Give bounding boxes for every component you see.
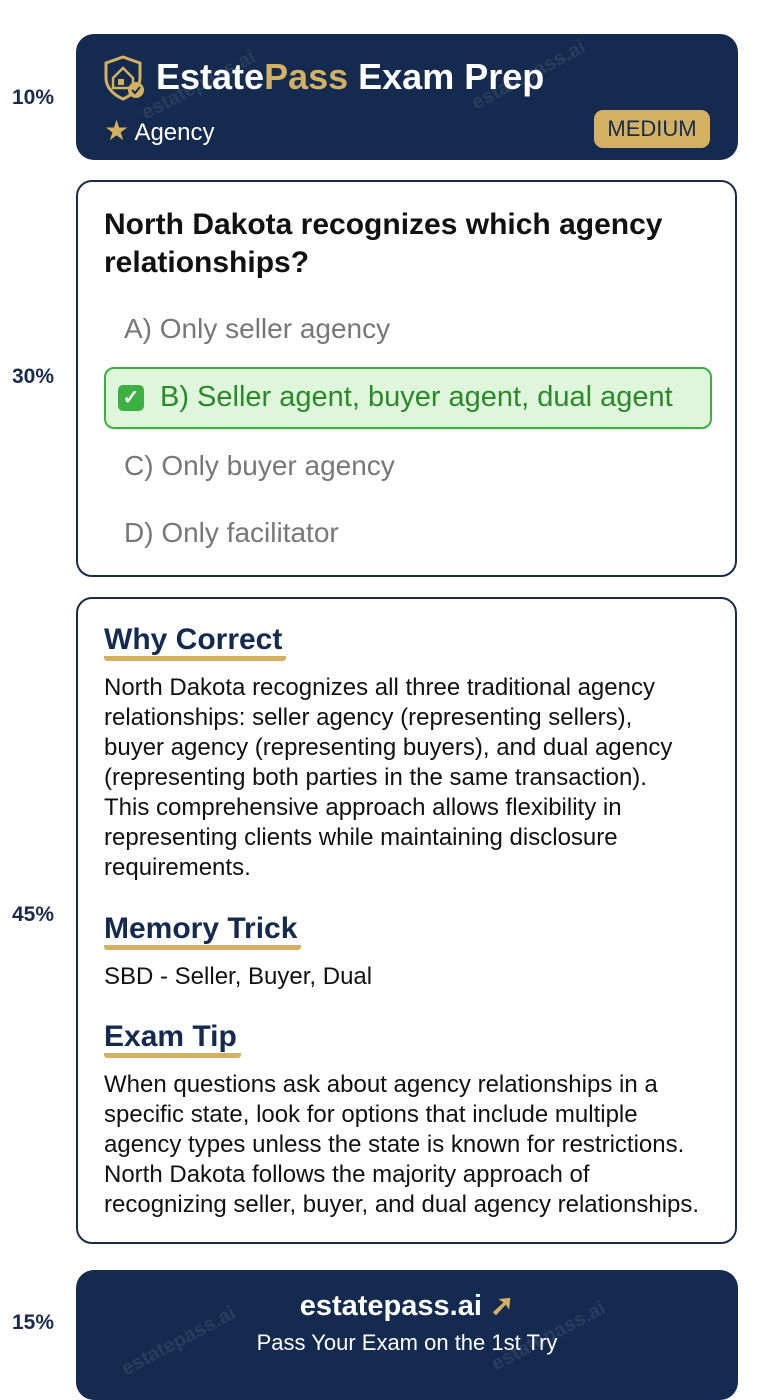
- label: 30%: 30%: [12, 365, 54, 388]
- icon: shield house: [104, 55, 144, 101]
- option A: A) Only seller agency: [124, 313, 390, 344]
- option B correct: [104, 367, 712, 429]
- heading: Exam Tip: Exam Tip: [104, 1020, 237, 1053]
- badge: MEDIUM: [594, 110, 710, 148]
- label: 45%: 45%: [12, 903, 54, 926]
- text: exam tip: recognizing seller, buyer, and dual agency relationships.: [104, 1191, 699, 1218]
- text: why correct: relationships: seller agency (representing sellers),: [104, 704, 632, 731]
- text: exam tip: specific state, look for options that include multiple: [104, 1101, 638, 1128]
- text: exam tip: [104, 1071, 699, 1218]
- header panel: [76, 34, 738, 160]
- text: why correct: representing clients while maintaining disclosure: [104, 824, 618, 851]
- option B correct: B) Seller agent, buyer agent, dual agent: [160, 381, 673, 413]
- question text: North Dakota recognizes which agency relationships?: [104, 208, 662, 279]
- header panel: estatepass.ai: [468, 36, 589, 114]
- label: 10%: 10%: [12, 86, 54, 109]
- text: why correct: buyer agency (representing buyers), and dual agency: [104, 734, 672, 761]
- option B correct: ✓: [123, 387, 139, 409]
- label: 15%: 15%: [12, 1311, 54, 1334]
- option D: D) Only facilitator: [124, 517, 339, 548]
- header panel: estatepass.ai: [138, 46, 259, 124]
- text: why correct: North Dakota recognizes all three traditional agency: [104, 674, 655, 701]
- text: why correct: requirements.: [104, 854, 251, 881]
- text: exam tip: North Dakota follows the majority approach of: [104, 1161, 590, 1188]
- title: EstatePass Exam Prep: [156, 56, 544, 97]
- footer brand: estatepass.ai ➚: [300, 1290, 514, 1322]
- badge: MEDIUM: MEDIUM: [607, 116, 697, 141]
- category: Agency: ★ Agency: [104, 115, 215, 146]
- option C: C) Only buyer agency: [124, 450, 395, 481]
- heading: Why Correct: Why Correct: [104, 623, 282, 656]
- text: why correct: [104, 674, 672, 881]
- text: exam tip: When questions ask about agency relationships in a: [104, 1071, 658, 1098]
- panel: question: [76, 180, 737, 577]
- footer panel: [76, 1270, 738, 1400]
- footer panel: estatepass.ai: [118, 1302, 239, 1380]
- panel: explanation: [76, 597, 737, 1244]
- heading: Memory Trick: Memory Trick: [104, 912, 297, 945]
- text: exam tip: agency types unless the state is known for restrictions.: [104, 1131, 684, 1158]
- footer panel: estatepass.ai: [488, 1297, 609, 1375]
- tagline: Pass Your Exam on the 1st Try: [257, 1330, 557, 1355]
- text: why correct: (representing both parties in the same transaction).: [104, 764, 647, 791]
- text: why correct: This comprehensive approach allows flexibility in: [104, 794, 622, 821]
- text: memory trick: SBD - Seller, Buyer, Dual: [104, 963, 372, 990]
